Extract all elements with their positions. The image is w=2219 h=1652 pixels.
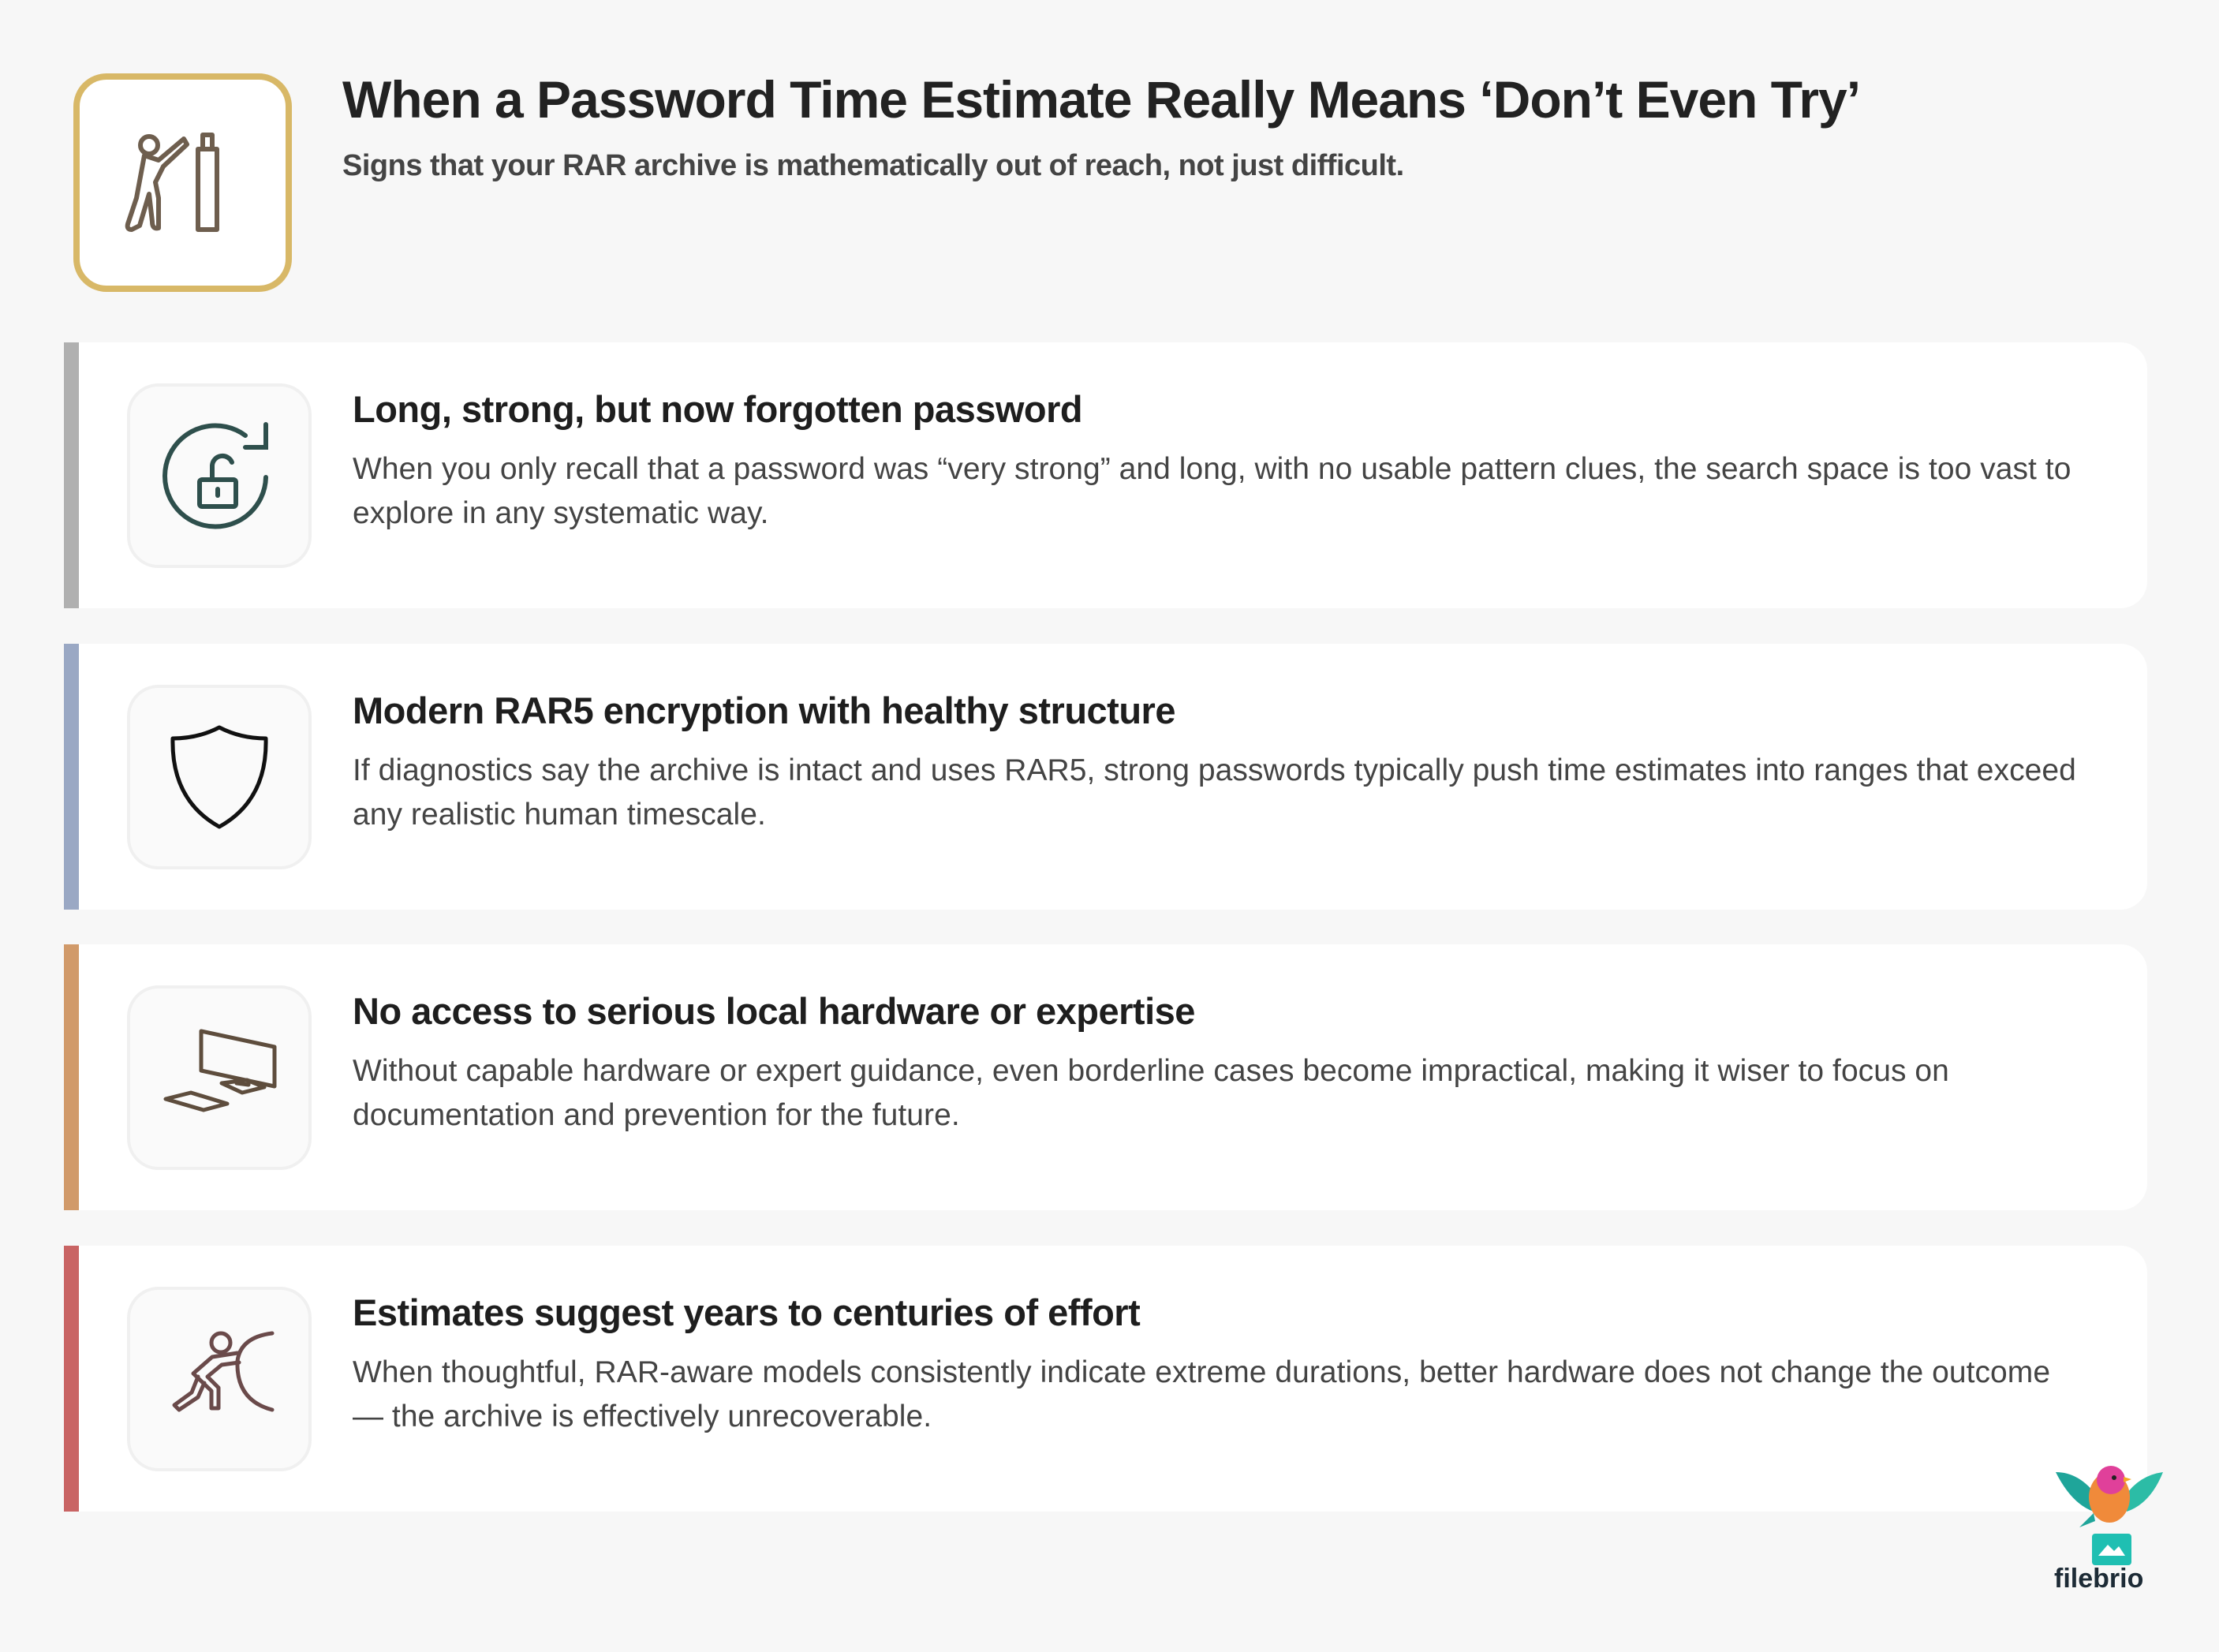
panel: RAR5 encryption (64, 644, 2076, 910)
heading: Estimates suggest years to centuries of effort (353, 1291, 1140, 1333)
text: any realistic human timescale. (353, 798, 766, 832)
text: When thoughtful, RAR-aware models consistently indicate extreme durations, better hardware does not change the outcome (353, 1355, 2050, 1389)
title: When a Password Time Estimate Really Means ‘Don’t Even Try’ (342, 70, 1860, 129)
icon: computer (127, 985, 312, 1170)
panel: no hardware (64, 944, 1949, 1210)
text (353, 452, 2071, 530)
icon: unlock refresh (127, 383, 312, 568)
text (353, 1355, 2050, 1433)
panel: long strong forgotten password (64, 342, 2071, 608)
logo: filebrio: filebrio (2054, 1564, 2143, 1594)
text: — the archive is effectively unrecoverable. (353, 1400, 932, 1433)
subtitle: Signs that your RAR archive is mathematically out of reach, not just difficult. (342, 149, 1404, 182)
panel: years to centuries (64, 1246, 2050, 1512)
icon: shield (127, 685, 312, 869)
text: If diagnostics say the archive is intact and uses RAR5, strong passwords typically push time estimates into ranges that exceed (353, 753, 2076, 787)
text: explore in any systematic way. (353, 496, 768, 530)
heading: No access to serious local hardware or expertise (353, 990, 1195, 1032)
text (353, 753, 2076, 832)
text: Without capable hardware or expert guidance, even borderline cases become impractical, making it wiser to focus on (353, 1054, 1949, 1088)
text: When you only recall that a password was “very strong” and long, with no usable pattern clues, the search space is too vast to (353, 452, 2071, 486)
icon: pushing figure (127, 1287, 312, 1471)
heading: Modern RAR5 encryption with healthy structure (353, 690, 1175, 731)
text: documentation and prevention for the future. (353, 1098, 960, 1132)
icon: header figure reaching (73, 73, 292, 292)
heading: Long, strong, but now forgotten password (353, 388, 1082, 430)
text (353, 1054, 1949, 1132)
logo: filebrio (2054, 1466, 2163, 1594)
